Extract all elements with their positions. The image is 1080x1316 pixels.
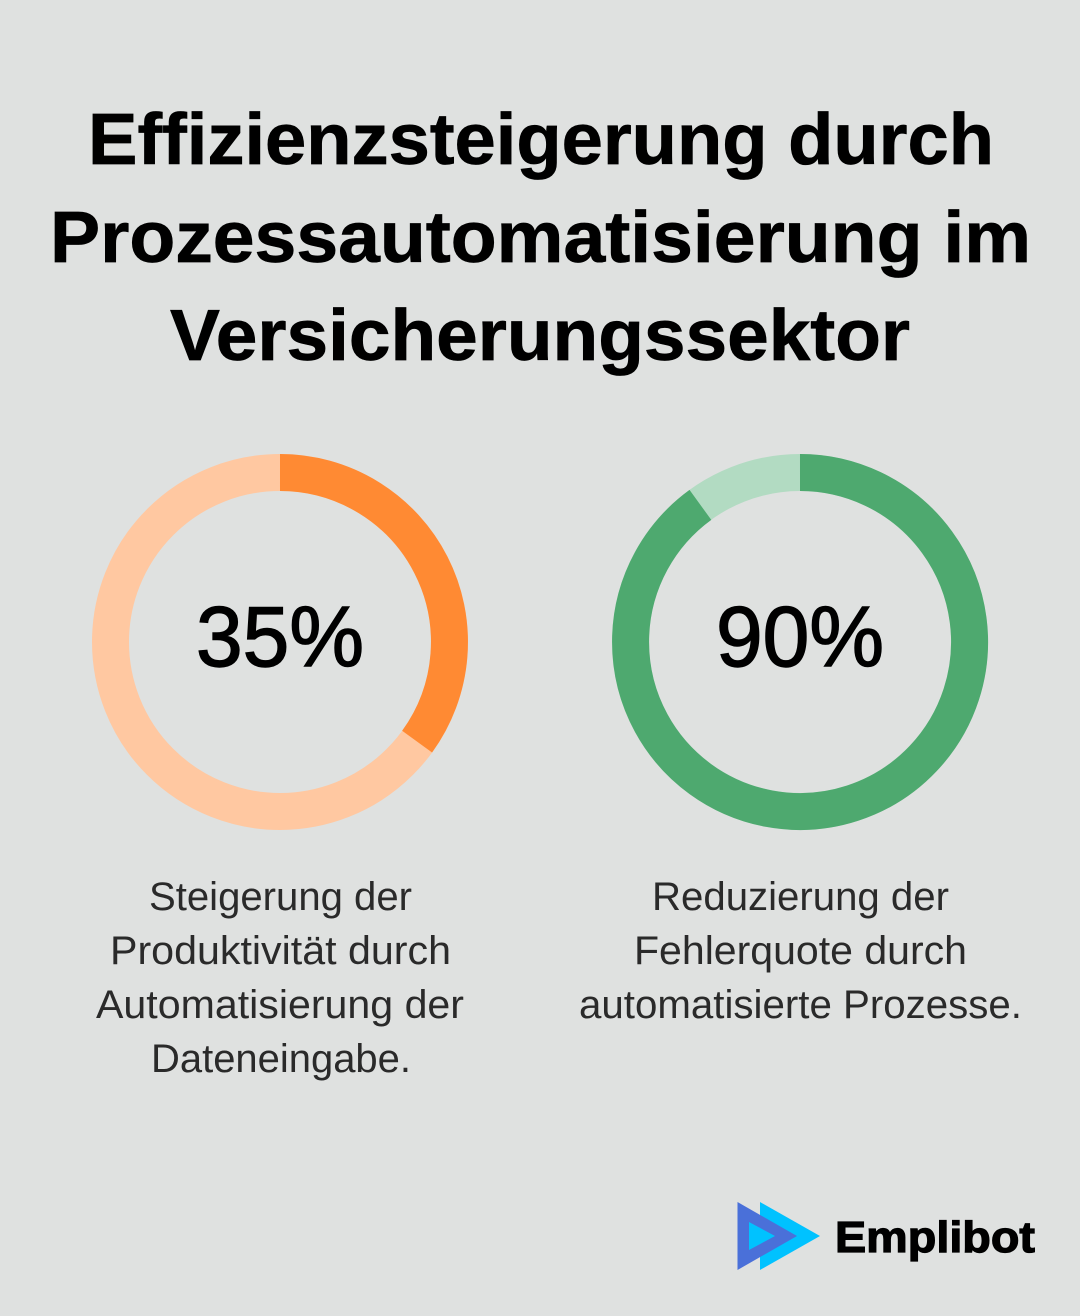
panel: error rate stat	[579, 472, 1022, 1027]
wordmark: Emplibot	[835, 1213, 1035, 1262]
icon: play triangles	[738, 1202, 820, 1270]
description: productivity: Steigerung der	[149, 875, 412, 919]
description: error rate: Reduzierung der	[652, 875, 949, 919]
logo: Emplibot	[738, 1202, 1035, 1270]
title: Versicherungssektor	[170, 296, 910, 376]
description: productivity: Dateneingabe.	[151, 1037, 411, 1081]
title: Prozessautomatisierung im	[50, 198, 1031, 278]
description: error rate: Fehlerquote durch	[634, 929, 967, 973]
description: productivity: Produktivität durch	[110, 929, 451, 973]
description: error rate	[579, 875, 1022, 1027]
description: error rate: automatisierte Prozesse.	[579, 983, 1022, 1027]
value: 90%: 90%	[716, 590, 884, 685]
value: 35%: 35%	[196, 590, 364, 685]
description: productivity	[96, 875, 464, 1081]
donut chart: 90%	[630, 472, 970, 812]
panel: productivity stat	[96, 472, 464, 1081]
description: productivity: Automatisierung der	[96, 983, 464, 1027]
title: Effizienzsteigerung durch	[88, 100, 994, 180]
title	[50, 100, 1031, 376]
donut chart: 35%	[110, 472, 450, 812]
